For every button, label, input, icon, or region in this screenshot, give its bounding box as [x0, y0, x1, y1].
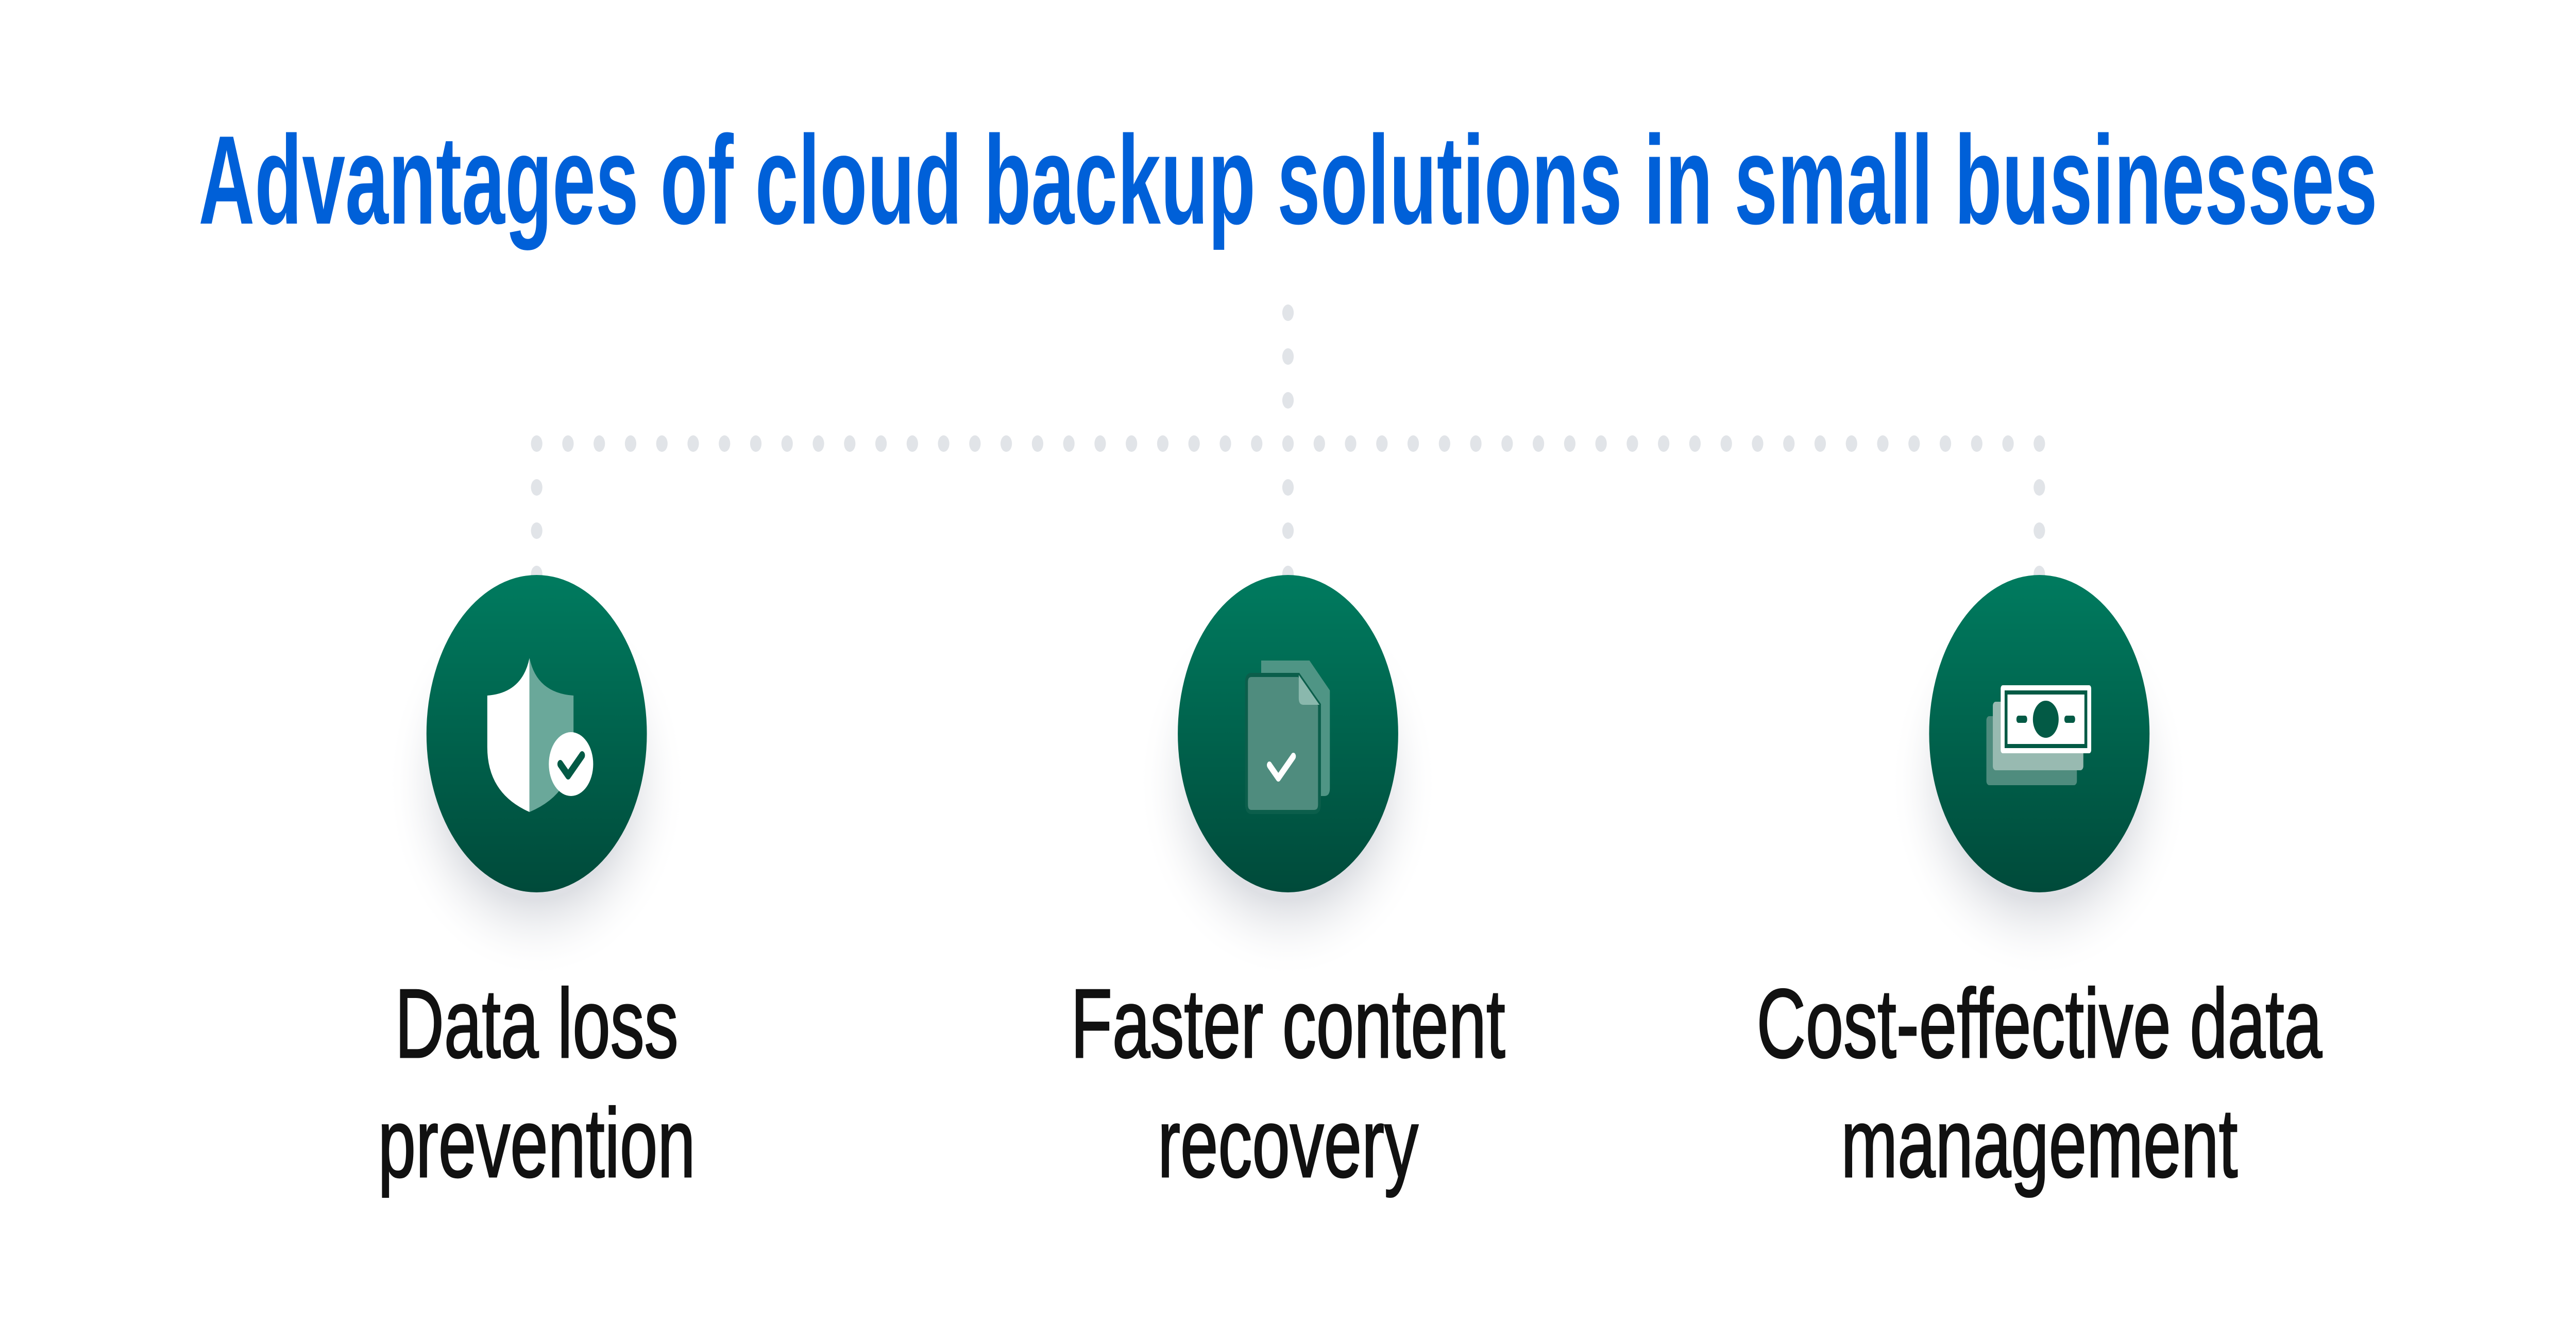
icon circle: documents	[1178, 575, 1398, 892]
label: Faster content	[1071, 969, 1505, 1078]
dotted connector lines	[531, 304, 2045, 582]
item: cost-effective data management	[1757, 575, 2322, 1198]
icon circle: shield	[427, 575, 647, 892]
item: faster content recovery	[1071, 575, 1505, 1198]
label: Cost-effective data	[1757, 969, 2322, 1078]
item: data loss prevention	[378, 575, 696, 1198]
label: Data loss	[395, 969, 679, 1078]
label: recovery	[1158, 1088, 1418, 1198]
label: management	[1841, 1088, 2238, 1198]
icon circle: money	[1929, 575, 2149, 892]
label: prevention	[378, 1088, 696, 1198]
